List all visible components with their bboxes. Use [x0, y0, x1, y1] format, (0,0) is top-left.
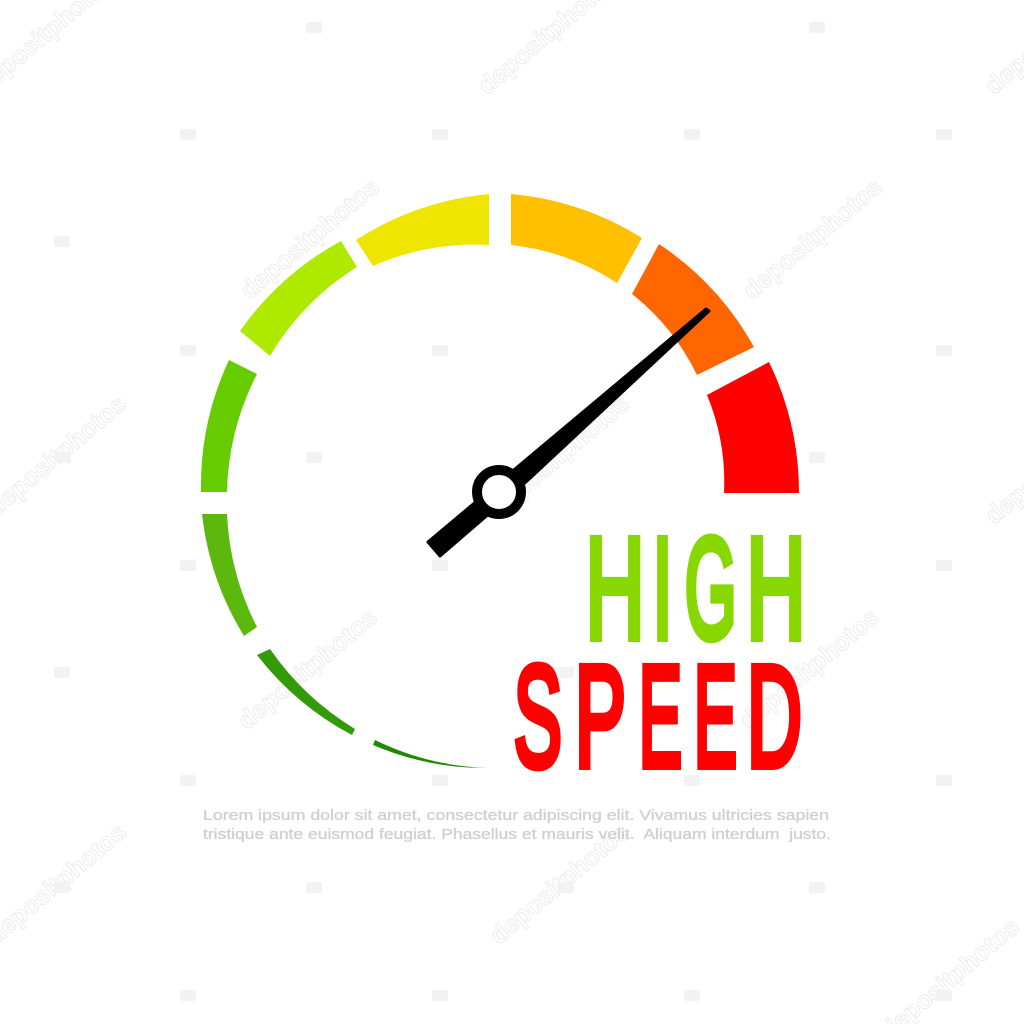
needle pointer — [428, 309, 709, 556]
title: HIGH: H — [746, 508, 806, 669]
title: SPEED: E — [694, 636, 737, 797]
segment: dark green — [257, 649, 355, 735]
needle hub — [477, 470, 521, 514]
segment: tail — [373, 740, 487, 768]
title: HIGH: H — [585, 508, 645, 669]
watermark text: depositphotos — [485, 818, 635, 950]
title: SPEED: E — [639, 636, 682, 797]
segment: orange — [632, 244, 754, 375]
watermark text: depositphotos — [233, 603, 383, 735]
title: SPEED: P — [575, 636, 626, 797]
segment: lime — [240, 241, 357, 356]
line 1: Lorem ipsum dolor sit amet, consectetur adipiscing elit. Vivamus ultricies sapien — [203, 808, 829, 824]
needle — [428, 309, 709, 556]
watermark text: depositphotos — [735, 603, 885, 735]
watermark text: depositphotos — [485, 390, 635, 522]
segment: green — [201, 360, 257, 492]
title: SPEED: S — [514, 636, 562, 797]
segment: yellow — [356, 194, 489, 266]
title: HIGH: G — [685, 508, 737, 669]
segment: amber — [511, 194, 642, 283]
title: SPEED: D — [747, 636, 802, 797]
watermark text: depositphotos — [235, 173, 385, 305]
title: HIGH: I — [652, 508, 672, 669]
watermark text: depositphotos — [738, 173, 888, 305]
gauge arc — [201, 194, 799, 768]
body text — [203, 808, 831, 843]
line 2: tristique ante euismod feugiat. Phasellus et mauris velit. Aliquam interdum justo. — [203, 827, 831, 843]
segment: red — [707, 362, 799, 493]
segment: mid green — [202, 514, 257, 636]
